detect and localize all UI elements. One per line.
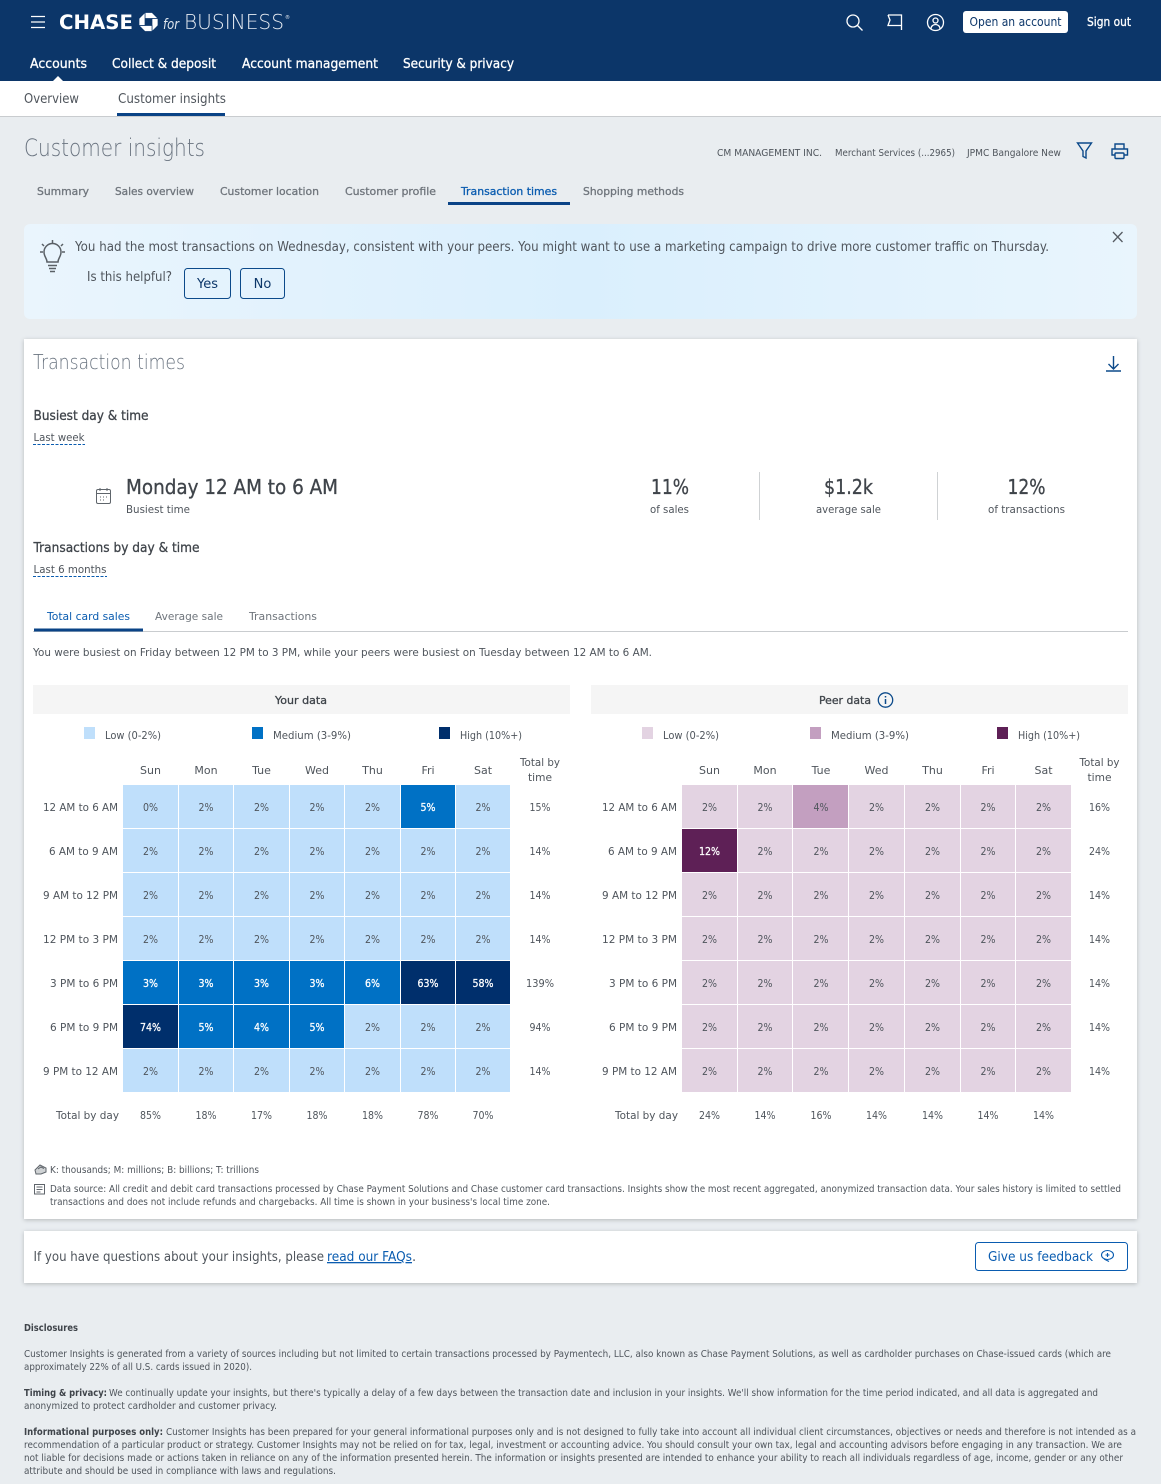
cell values: your data: 2% [420,889,436,902]
cell values: your data: 3% [143,977,158,990]
legend: your data [84,727,522,742]
column headers: your data: time [528,771,552,784]
cell values: your data: 2% [143,845,158,858]
cell values: peer data: 2% [1036,845,1051,858]
account filters: CM MANAGEMENT INC. [717,148,822,159]
cell values: your data: 2% [310,801,324,814]
button: no [240,268,284,298]
open an account button: Open an account [970,15,1062,29]
cell values: your data: 139% [526,977,554,990]
cell values: your data: 18% [362,1109,383,1122]
cell values: peer data: 2% [1036,1065,1051,1078]
cell values: peer data: 2% [925,1021,940,1034]
cell values: peer data: 2% [814,1021,828,1034]
disclosure: timing and privacy: anonymized to protect cardholder and customer privacy. [24,1401,277,1412]
disclosures: Disclosures [24,1323,78,1334]
disclosure: timing and privacy [24,1388,1098,1412]
cell values: your data: 2% [310,933,324,946]
legend: your data: High (10%+) [460,729,522,742]
cell values: your data: 2% [310,1065,324,1078]
cell values: peer data: 2% [869,1065,884,1078]
section tabs: Shopping methods [583,185,684,198]
cell values: peer data: 14% [1089,1065,1110,1078]
cell values: your data: 2% [254,889,269,902]
open an account button [963,11,1068,33]
cell values: your data: 18% [196,1109,216,1122]
busiest time: Monday 12 AM to 6 AM [126,475,338,499]
stat: average sale [816,475,881,516]
column headers: peer data: Fri [981,764,995,777]
column headers: your data: Tue [251,764,271,777]
row labels: your data: 6 PM to 9 PM [50,1021,118,1034]
cell values: peer data: 2% [702,801,717,814]
cell values: your data: 2% [476,801,490,814]
cell values: your data: 78% [418,1109,438,1122]
cell values: peer data: 2% [925,889,940,902]
feedback button [976,1242,1128,1270]
cell values: peer data: 2% [758,977,772,990]
sign out: Sign out [1087,15,1131,29]
disclosure: informational purposes: Informational purposes only: [24,1427,163,1438]
cell values: peer data: 2% [814,977,828,990]
row labels: your data: 3 PM to 6 PM [50,977,118,990]
stat: share of sales: of sales [650,503,689,516]
busiest day heading: Busiest day & time [34,408,148,424]
cell values: peer data: 2% [869,889,884,902]
cell values: your data: 2% [365,1021,380,1034]
cell values: peer data: 24% [699,1109,720,1122]
row labels: peer data: 6 PM to 9 PM [609,1021,677,1034]
brand logo: CHASE [59,11,133,34]
metric tabs [33,610,1128,632]
panel: your data [33,685,570,1122]
row labels: peer data: 12 PM to 3 PM [602,933,677,946]
cell values: peer data: 2% [702,1065,717,1078]
cell values: your data: 3% [198,977,214,990]
busiest time: Busiest time [126,503,190,516]
cell values: your data: 17% [251,1109,272,1122]
cell values: your data: 85% [140,1109,161,1122]
column headers: peer data: Sat [1034,764,1053,777]
cell values: your data: 15% [530,801,550,814]
icon: close [1113,232,1122,242]
main menu: Security & privacy [403,56,514,72]
cell values: your data: 2% [476,1021,490,1034]
icon: calendar [96,488,110,504]
brand logo: ® [285,14,290,21]
data source note [50,1184,1121,1208]
cell values: your data: 2% [143,933,158,946]
legend: your data: Medium (3-9%) [273,729,351,742]
cell values: peer data: 2% [869,1021,884,1034]
row labels: peer data [602,801,678,1122]
cell values: your data: 3% [310,977,324,990]
cell values: peer data: 2% [758,801,772,814]
cell values: your data: 2% [365,933,380,946]
row labels: your data: Total by day [55,1109,119,1122]
brand logo [59,10,290,34]
cell values: your data: 2% [254,801,269,814]
cell values: your data: 2% [198,889,214,902]
cell values: peer data: 2% [758,1021,772,1034]
cell values: peer data: 2% [702,933,717,946]
peer data heading [591,685,1128,714]
icon: feedback bubble [1102,1250,1114,1262]
cell values: peer data: 2% [758,845,772,858]
column headers: peer data [699,756,1120,784]
cell values: your data: 2% [420,933,436,946]
cell values: peer data: 2% [814,1065,828,1078]
main menu: Accounts [30,56,87,72]
column headers: your data: Sat [474,764,493,777]
insight banner [24,224,1137,319]
data source note: transactions and does not include refunds and chargebacks. All time is shown in your business's local time zone. [50,1197,550,1208]
row labels: peer data: Total by day [614,1109,678,1122]
busiest time [126,475,338,516]
cell values: your data: 2% [476,1065,490,1078]
icon: money units [35,1165,46,1174]
faq text: read our FAQs [327,1250,412,1265]
cell values: your data: 14% [530,889,550,902]
cell values: your data: 2% [476,845,490,858]
cell values: your data: 5% [420,801,436,814]
main menu [30,56,514,81]
stat: share of transactions: 12% [1008,475,1046,499]
cell values: your data: 4% [254,1021,269,1034]
brand logo: for [163,17,180,33]
cell values: peer data: 2% [980,1065,996,1078]
faq text: . [412,1250,416,1265]
metric tabs: Transactions [248,610,317,623]
cell values: your data: 70% [472,1109,494,1122]
units note: K: thousands; M: millions; B: billions; T: trillions [50,1165,259,1176]
cell values: peer data: 14% [1089,977,1110,990]
main menu: Collect & deposit [112,56,216,72]
cell values: your data: 14% [530,845,550,858]
cell values: your data: 2% [365,801,380,814]
panel: questions and feedback [24,1231,1137,1283]
your data heading: Your data [274,694,327,707]
column headers: peer data: Thu [921,764,943,777]
cell values: your data: 5% [310,1021,324,1034]
main menu: Account management [242,56,378,72]
peer data heading: Peer data [819,694,871,707]
section tabs: Transaction times [460,185,557,198]
column headers: peer data: time [1088,771,1112,784]
cell values: your data: 0% [143,801,158,814]
section tabs [37,185,684,205]
disclosure: informational purposes [24,1427,1136,1477]
cell values: peer data [699,801,1110,1122]
secondary navigation: Customer insights [118,92,226,107]
transactions by day heading: Transactions by day & time [33,540,200,556]
account filters [717,148,1061,159]
account filters: Merchant Services (...2965) [835,148,955,159]
column headers: your data: Wed [305,764,329,777]
period selector: last week: Last week [34,431,85,444]
cell values: your data: 2% [143,889,158,902]
icon: download [1106,356,1121,371]
panel: peer data [591,685,1128,1122]
button: yes: Yes [196,277,218,292]
heatmap cells: your data [123,785,510,1092]
stat: average sale: $1.2k [824,475,873,499]
cell values: peer data: 2% [869,933,884,946]
period selector: last 6 months: Last 6 months [34,563,107,576]
icon: flag [888,15,902,30]
cell values: peer data: 2% [925,977,940,990]
feedback button: Give us feedback [988,1250,1093,1265]
cell values: your data: 2% [365,889,380,902]
cell values: your data: 3% [254,977,269,990]
stat: share of transactions: of transactions [988,503,1065,516]
legend: peer data: Medium (3-9%) [831,729,909,742]
column headers: peer data: Wed [865,764,888,777]
cell values: your data: 2% [254,845,269,858]
heatmap cells: peer data [682,785,1071,1092]
column headers: your data: Sun [140,764,161,777]
cell values: peer data: 2% [925,845,940,858]
cell values: peer data: 2% [925,801,940,814]
cell values: your data: 2% [254,1065,269,1078]
row labels: peer data: 3 PM to 6 PM [609,977,677,990]
section tabs: Summary [37,185,89,198]
section tabs: Customer profile [345,185,436,198]
cell values: peer data: 2% [980,845,996,858]
column headers: your data: Total by [519,756,560,769]
cell values: peer data: 24% [1089,845,1110,858]
icon: light bulb [40,240,65,272]
stat: average sale: average sale [816,503,881,516]
your data heading [33,685,570,714]
legend: peer data: Low (0-2%) [663,729,719,742]
cell values: your data: 63% [418,977,438,990]
disclosure: general: approximately 22% of all U.S. cards issued in 2020). [24,1362,252,1373]
icon: filter [1078,143,1092,158]
cell values: peer data: 14% [978,1109,998,1122]
account filters: JPMC Bangalore New [966,148,1061,159]
cell values: peer data: 14% [1089,933,1110,946]
cell values: peer data: 2% [869,977,884,990]
column headers: your data: Thu [361,764,383,777]
cell values: peer data: 2% [1036,801,1051,814]
cell values: peer data: 12% [699,845,720,858]
button: yes [184,268,230,298]
button: no: No [254,277,271,292]
row labels: your data: 12 PM to 3 PM [43,933,118,946]
cell values: peer data: 2% [980,889,996,902]
cell values: your data: 14% [530,933,550,946]
cell values: peer data: 2% [980,977,996,990]
cell values: your data: 14% [530,1065,550,1078]
cell values: peer data: 2% [702,977,717,990]
row labels: peer data: 6 AM to 9 AM [608,845,677,858]
icon: menu [31,16,45,28]
cell values: your data: 2% [254,933,269,946]
cell values: your data: 2% [365,1065,380,1078]
cell values: peer data: 2% [925,933,940,946]
row labels: your data [43,801,119,1122]
cell values: peer data: 2% [814,933,828,946]
cell values: peer data: 2% [758,1065,772,1078]
cell values: peer data: 14% [922,1109,943,1122]
cell values: peer data: 2% [702,1021,717,1034]
heatmap summary text: You were busiest on Friday between 12 PM to 3 PM, while your peers were busiest on Tuesday between 12 AM to 6 AM. [32,646,652,659]
cell values: peer data: 2% [814,845,828,858]
legend: your data: Low (0-2%) [105,729,161,742]
cell values: your data: 6% [365,977,380,990]
icon: document [34,1184,44,1194]
cell values: peer data: 2% [1036,889,1051,902]
cell values: your data: 2% [420,1065,436,1078]
disclosure: general [24,1349,1111,1373]
column headers: peer data: Tue [811,764,831,777]
cell values: peer data: 2% [758,933,772,946]
cell values: your data: 2% [198,1065,214,1078]
feedback prompt: Is this helpful? [87,270,172,285]
cell values: your data: 2% [310,889,324,902]
cell values: peer data: 2% [1036,933,1051,946]
legend: peer data [642,727,1080,742]
metric tabs: Total card sales [46,610,130,623]
icon: print [1112,144,1128,158]
cell values: peer data: 2% [758,889,772,902]
cell values: peer data: 2% [814,889,828,902]
cell values: peer data: 16% [1089,801,1110,814]
cell values: peer data: 2% [980,933,996,946]
metric tabs: Average sale [155,610,223,623]
section tabs: Sales overview [115,185,194,198]
cell values: your data: 2% [310,845,324,858]
cell values: your data: 2% [143,1065,158,1078]
row labels: your data: 9 PM to 12 AM [43,1065,118,1078]
row labels: peer data: 9 PM to 12 AM [602,1065,677,1078]
secondary navigation: Overview [24,92,79,107]
cell values: your data: 2% [198,801,214,814]
cell values: your data: 2% [420,845,436,858]
column headers: your data: Fri [421,764,435,777]
cell values: your data: 2% [420,1021,436,1034]
cell values: your data: 94% [530,1021,550,1034]
column headers: peer data: Sun [699,764,720,777]
cell values: your data: 2% [476,933,490,946]
cell values: your data: 58% [472,977,494,990]
column headers: your data: Mon [194,764,218,777]
column headers: your data [140,756,560,784]
cell values: your data: 74% [140,1021,161,1034]
cell values: peer data: 2% [980,801,996,814]
cell values: peer data: 2% [1036,1021,1051,1034]
cell values: your data: 5% [198,1021,214,1034]
cell values: your data: 2% [476,889,490,902]
cell values: peer data: 2% [1036,977,1051,990]
section tabs: Customer location [220,185,319,198]
legend: peer data: High (10%+) [1018,729,1080,742]
row labels: your data: 9 AM to 12 PM [43,889,118,902]
disclosure: informational purposes: attribute and should be used in compliance with laws and regulations. [24,1466,336,1477]
insight text: You had the most transactions on Wednesday, consistent with your peers. You might want to use a marketing campaign to drive more customer traffic on Thursday. [74,240,1049,255]
top navigation bar [0,0,1161,81]
cell values: peer data: 2% [869,801,884,814]
cell values: peer data: 14% [1089,1021,1110,1034]
faq text: If you have questions about your insights, please [34,1250,324,1265]
cell values: peer data: 16% [810,1109,832,1122]
cell values: your data [140,801,554,1122]
row labels: peer data: 12 AM to 6 AM [602,801,677,814]
icon: user [928,14,944,30]
cell values: your data: 2% [198,845,214,858]
page title: Customer insights [24,134,205,162]
cell values: peer data: 2% [925,1065,940,1078]
cell values: peer data: 4% [814,801,828,814]
stat: share of sales [650,475,689,516]
cell values: peer data: 14% [866,1109,887,1122]
row labels: your data: 12 AM to 6 AM [43,801,118,814]
cell values: peer data: 14% [1089,889,1110,902]
secondary navigation [0,81,1161,117]
stat: share of transactions [988,475,1065,516]
cell values: your data: 2% [365,845,380,858]
row labels: your data: 6 AM to 9 AM [49,845,118,858]
cell values: peer data: 2% [702,889,717,902]
row labels: peer data: 9 AM to 12 PM [602,889,677,902]
disclosures [24,1323,1136,1477]
cell values: peer data: 14% [754,1109,776,1122]
cell values: your data: 2% [198,933,214,946]
panel: transaction times [24,339,1137,1219]
icon: search [847,15,862,30]
cell values: your data: 18% [306,1109,328,1122]
brand logo: BUSINESS [184,10,284,34]
stat: share of sales: 11% [651,475,689,499]
disclosure: timing and privacy: Timing & privacy: [24,1388,107,1399]
column headers: peer data: Total by [1079,756,1120,769]
cell values: peer data: 14% [1033,1109,1054,1122]
cell values: peer data: 2% [869,845,884,858]
card heading: Transaction times [33,350,185,374]
column headers: peer data: Mon [753,764,777,777]
cell values: peer data: 2% [980,1021,996,1034]
